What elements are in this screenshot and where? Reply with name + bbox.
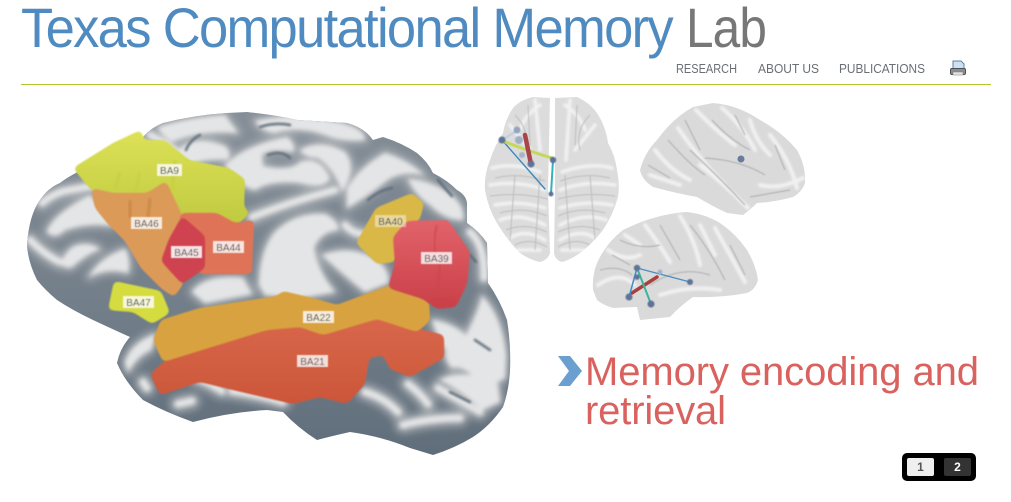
navigation menu: ABOUT US (758, 62, 819, 76)
slide caption: retrieval (585, 389, 726, 433)
network edges (629, 268, 690, 304)
network edges (502, 130, 553, 194)
area labels: BA39 (424, 254, 449, 265)
region BA44 (180, 213, 254, 274)
navigation menu: PUBLICATIONS (839, 62, 925, 76)
icon: chevron arrow (558, 356, 582, 386)
slide pager (902, 453, 976, 481)
area labels: BA9 (160, 166, 179, 177)
main brain illustration (27, 112, 510, 455)
brain surface (27, 112, 510, 455)
pager button 2: 2 (954, 460, 961, 474)
slide caption: Memory encoding and (585, 350, 979, 394)
area labels: BA46 (134, 219, 159, 230)
network nodes (498, 126, 556, 196)
slide caption (585, 350, 979, 433)
region BA9 (73, 130, 250, 227)
area labels: BA21 (300, 357, 325, 368)
network node (738, 156, 744, 162)
area labels: BA45 (174, 248, 199, 259)
navigation menu (676, 62, 925, 76)
brain network: lateral view bottom (593, 212, 758, 320)
area labels: BA22 (306, 313, 331, 324)
area labels: BA47 (126, 298, 151, 309)
region BA39 (388, 220, 470, 309)
area labels: BA40 (378, 217, 403, 228)
brain network: top view (485, 97, 619, 262)
region BA45 (161, 216, 205, 284)
area labels (123, 164, 452, 368)
region BA40 (356, 193, 424, 264)
navigation menu: RESEARCH (676, 62, 737, 76)
region BA47 (108, 281, 170, 324)
area labels: BA44 (216, 243, 241, 254)
brain network: lateral view right (640, 103, 805, 215)
region BA22 (153, 285, 430, 362)
region BA46 (91, 181, 184, 297)
header divider (21, 84, 991, 85)
network nodes (626, 265, 693, 308)
region BA21 (150, 315, 444, 404)
icon: printer (950, 61, 966, 75)
pager button 1: 1 (917, 460, 924, 474)
